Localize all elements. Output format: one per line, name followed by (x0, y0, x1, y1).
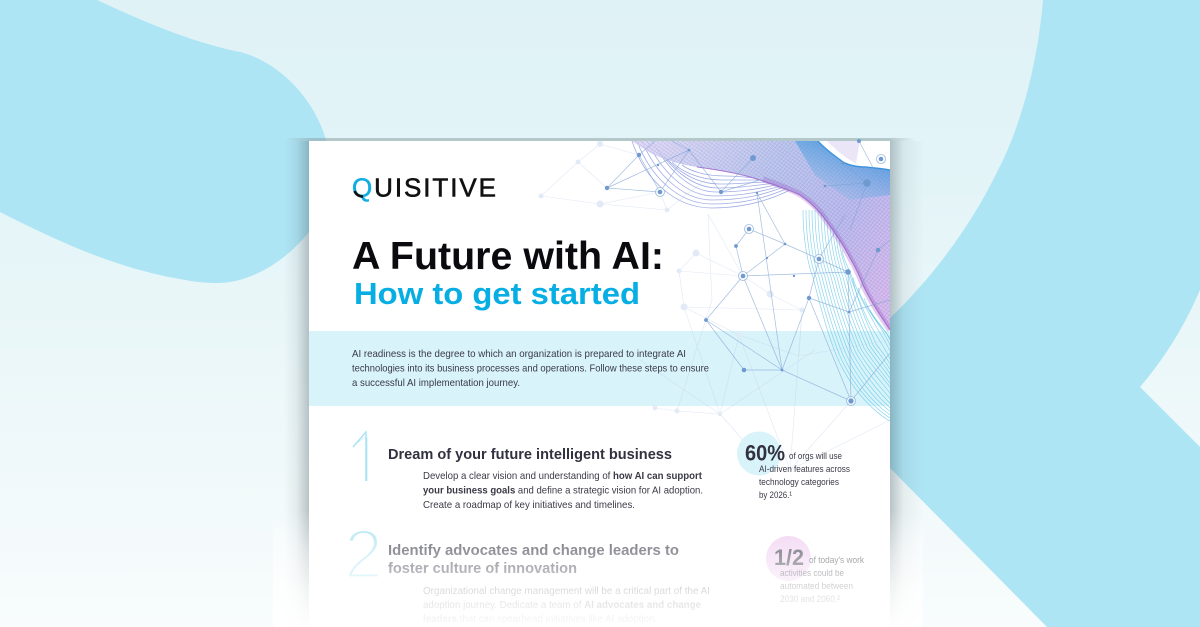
step 2 heading: Identify advocates and change leaders to (388, 543, 679, 559)
intro text: a successful AI implementation journey. (352, 377, 520, 389)
step 1 heading: Dream of your future intelligent business (388, 447, 672, 463)
stat 1: 60%: 60% (745, 440, 785, 466)
dense mesh ribbon (632, 141, 890, 330)
network: faint (538, 141, 890, 470)
title (352, 235, 664, 311)
step 1 body: Develop a clear vision and understanding of how AI can support (423, 470, 702, 482)
network: main nodes (605, 139, 890, 406)
subtitle: How to get started (354, 276, 640, 311)
stat 1: 60%: of orgs will use (789, 451, 842, 461)
ribbon edge (697, 167, 890, 330)
step 2 heading: foster culture of innovation (388, 561, 577, 577)
stat 2: 1/2: activities could be (780, 568, 844, 578)
wave artwork (632, 141, 895, 424)
title: A Future with AI: (352, 235, 664, 278)
step 1 number: 1 (345, 421, 385, 501)
step 1 body (423, 470, 703, 511)
step 2 number: 2 (344, 515, 383, 593)
top right hatch (827, 141, 860, 163)
mesh white hatching (632, 141, 890, 330)
stat 2: 1/2: 2030 and 2060.² (780, 594, 840, 604)
step 2 body: Organizational change management will be a critical part of the AI (423, 585, 710, 597)
stat 1: 60%: AI-driven features across (759, 464, 850, 474)
cyan line curves (803, 210, 895, 424)
step 1 number (352, 430, 368, 481)
stat 2: 1/2: automated between (780, 581, 853, 591)
step 2 body: leaders that can spearhead initiatives like AI adoption. (423, 613, 657, 625)
logo: QUISITIVE: QUISITIVE (352, 172, 496, 202)
step 1 body: Create a roadmap of key initiatives and timelines. (423, 499, 635, 511)
stat 2: 1/2 (766, 536, 864, 604)
blue upper part of mesh (795, 141, 890, 200)
step 2 heading (388, 543, 679, 577)
mesh hatching (632, 141, 890, 330)
step 1 body: your business goals and define a strategic vision for AI adoption. (423, 484, 703, 496)
intro text (352, 348, 709, 389)
card shadow (284, 138, 924, 627)
blob: right (880, 0, 1200, 627)
stat 1: 60%: by 2026.¹ (759, 490, 792, 500)
bowl arcs (632, 141, 790, 208)
ribbon edge glow (763, 179, 890, 330)
stat 2: 1/2: 1/2 (774, 545, 804, 570)
blue edge (818, 141, 890, 170)
stat 1: 60% (737, 432, 850, 500)
card (309, 141, 890, 627)
intro text: technologies into its business processes and operations. Follow these steps to ensure (352, 362, 709, 374)
intro band (309, 331, 890, 406)
stat 1: 60%: technology categories (759, 477, 839, 487)
blob: top left (0, 0, 330, 283)
step 2 body (423, 585, 710, 625)
stat 2: 1/2: of today's work (809, 555, 864, 565)
intro text: AI readiness is the degree to which an organization is prepared to integrate AI (352, 348, 686, 360)
bottom white fade (273, 510, 923, 627)
step 2 body: adoption journey. Dedicate a team of AI advocates and change (423, 599, 701, 611)
